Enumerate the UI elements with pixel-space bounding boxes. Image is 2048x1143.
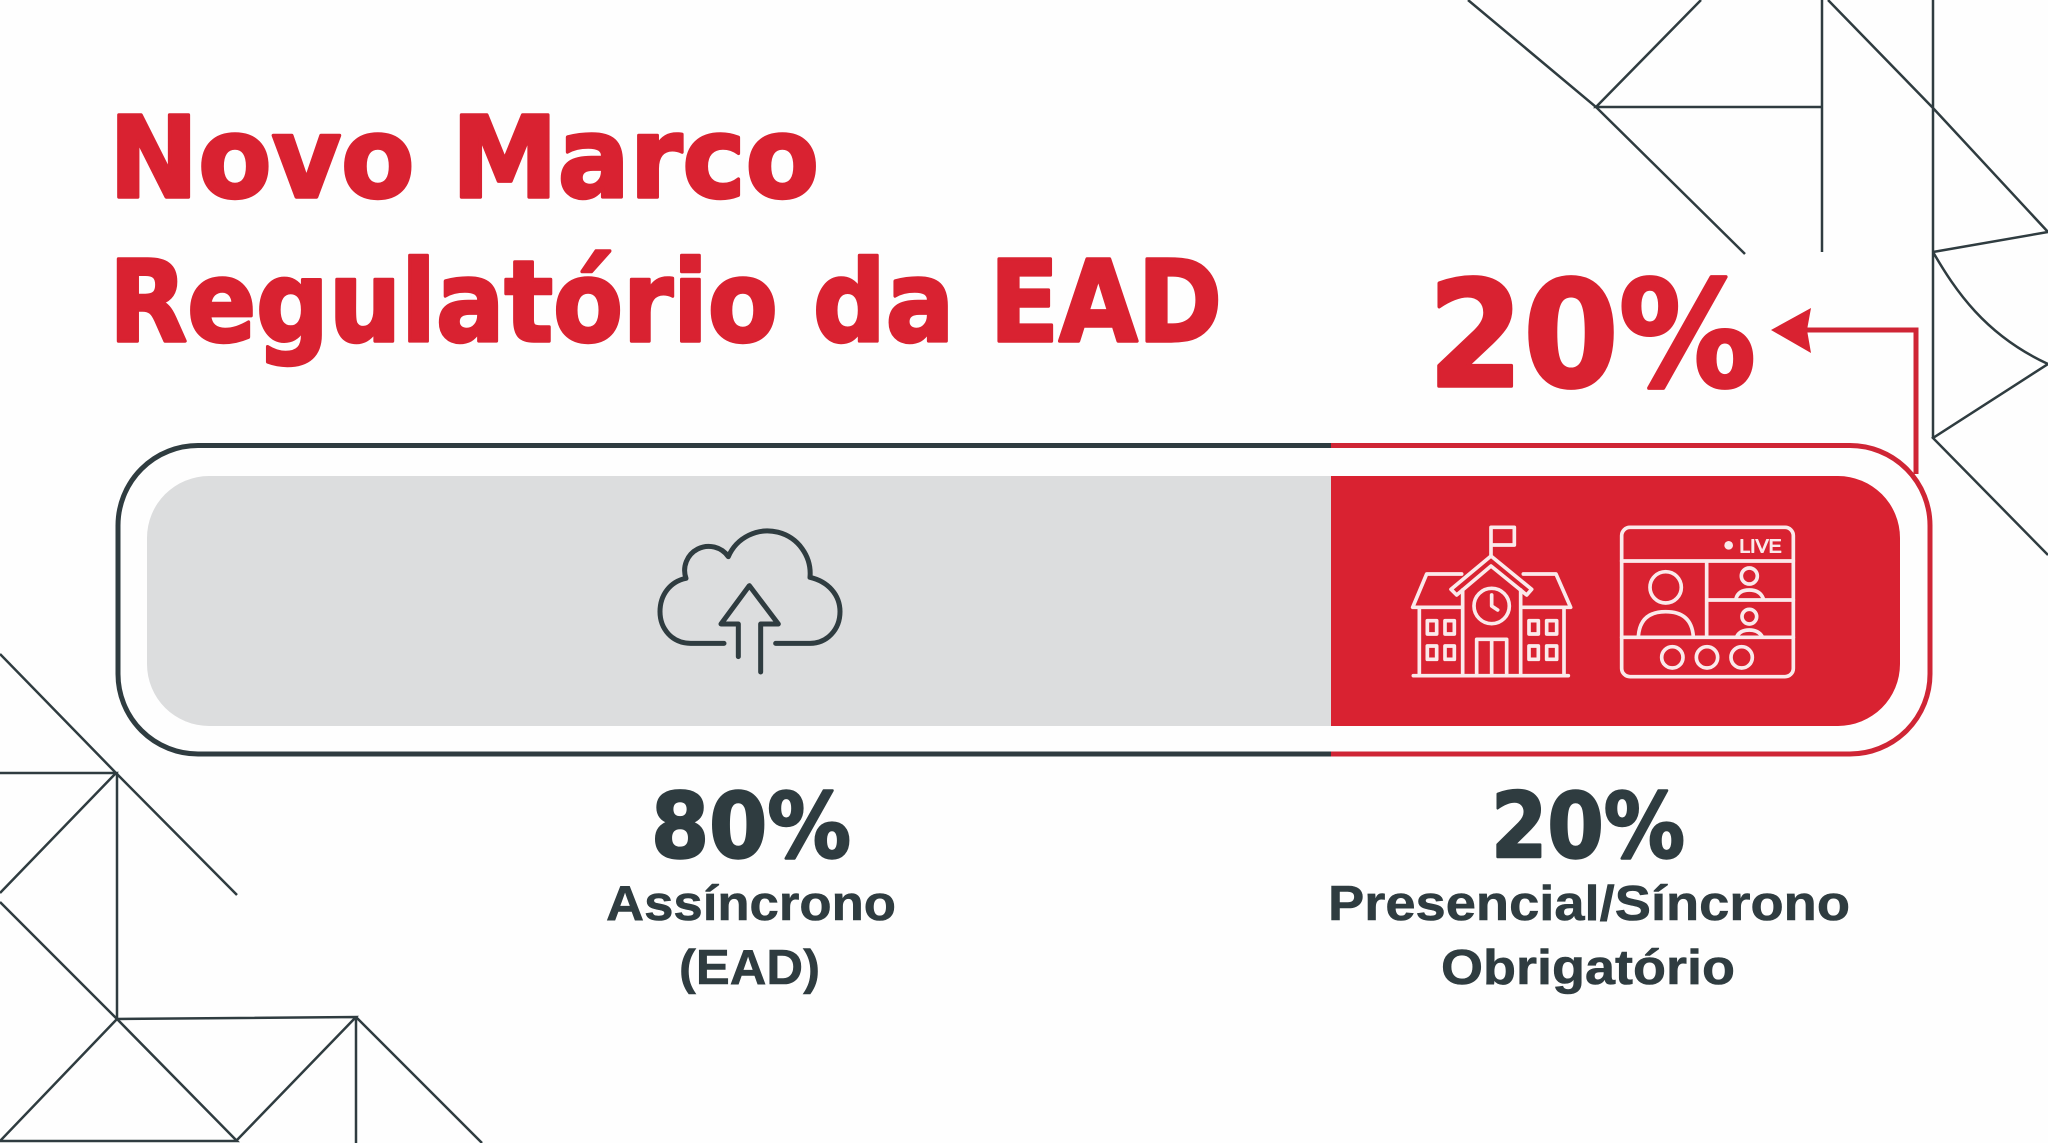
progress bar xyxy=(118,446,1930,754)
label: 20% in-person/synchronous xyxy=(1328,774,1850,995)
value 80%: 80% xyxy=(651,774,851,879)
text: (EAD): (EAD) xyxy=(679,941,820,995)
arrow shaft xyxy=(1805,330,1916,474)
text: Presencial/Síncrono: Presencial/Síncrono xyxy=(1328,877,1850,931)
label: 80% asynchronous xyxy=(606,774,896,995)
title xyxy=(109,94,1222,368)
value 20%: 20% xyxy=(1491,774,1685,879)
icon: live video conference: LIVE xyxy=(1739,536,1782,557)
title line 1: Novo Marco xyxy=(109,94,819,224)
bar outline: 80% segment xyxy=(118,446,1331,754)
arrow from bar to 20% figure xyxy=(1771,308,1916,474)
bar fill: 80% asynchronous xyxy=(147,476,1331,726)
text: Obrigatório: Obrigatório xyxy=(1441,941,1735,995)
bar outline: 20% segment xyxy=(1331,446,1930,754)
arrow head xyxy=(1771,308,1811,353)
icon: cloud upload xyxy=(660,531,840,672)
icon: live video conference xyxy=(1622,527,1793,677)
title line 2: Regulatório da EAD xyxy=(109,238,1222,368)
bar fill: 20% in-person/synchronous xyxy=(1331,476,1900,726)
highlighted 20% figure: 20% xyxy=(1428,250,1756,421)
icon: school building xyxy=(1413,527,1571,676)
text: Assíncrono: Assíncrono xyxy=(606,877,896,931)
